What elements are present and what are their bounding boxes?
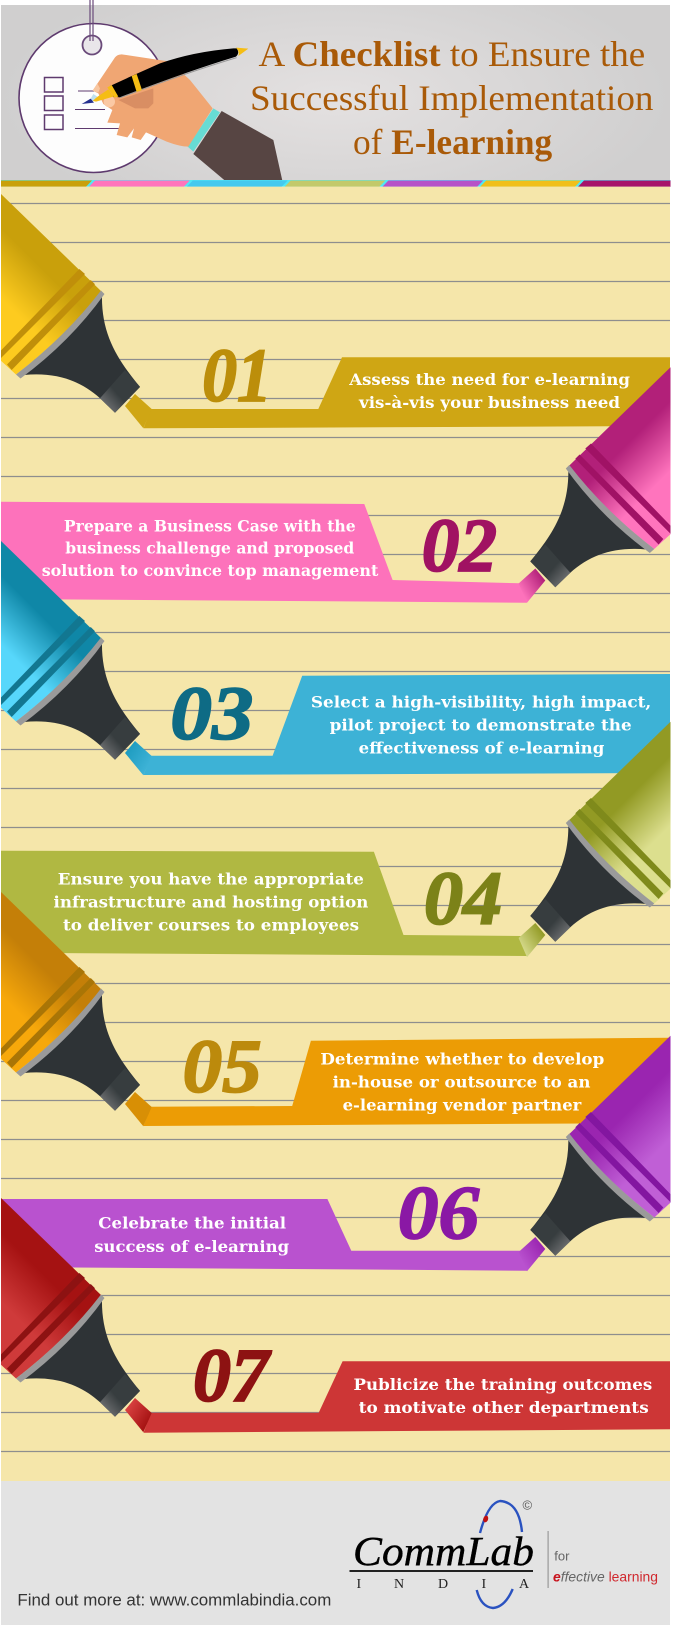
number 05: 05 xyxy=(183,1025,262,1109)
highlighter marker 1 xyxy=(0,191,152,428)
title: of E-learning xyxy=(353,122,552,162)
step 2 text: business challenge and proposed xyxy=(65,539,354,558)
step 5 text xyxy=(320,1050,604,1115)
CommLab India logo xyxy=(350,1498,658,1608)
step 2 text xyxy=(42,517,379,580)
step 7 text: to motivate other departments xyxy=(359,1398,649,1417)
CommLab India logo: D xyxy=(438,1577,448,1592)
icon: checklist tag, hand and pen xyxy=(19,0,282,181)
ribbon 7 xyxy=(144,1361,670,1433)
CommLab India logo: I xyxy=(482,1577,486,1592)
step 6 text: success of e-learning xyxy=(94,1237,289,1256)
ribbon 6 xyxy=(0,1199,527,1271)
ribbon 1 xyxy=(144,357,670,428)
step 1 text xyxy=(348,370,630,412)
number 04: 04 xyxy=(424,857,502,941)
CommLab India logo: N xyxy=(394,1577,404,1592)
CommLab India logo: © xyxy=(522,1498,532,1512)
CommLab India logo: for xyxy=(554,1549,570,1564)
step 5 text: e-learning vendor partner xyxy=(343,1096,582,1115)
CommLab India logo: effective learning xyxy=(553,1569,658,1585)
footer link text: Find out more at: www.commlabindia.com xyxy=(17,1591,331,1610)
highlighter marker 4 xyxy=(519,720,672,957)
step 7 text: Publicize the training outcomes xyxy=(354,1375,652,1394)
number 07: 07 xyxy=(193,1334,272,1418)
step 2 text: Prepare a Business Case with the xyxy=(64,517,356,536)
step 3 text: Select a high-visibility, high impact, xyxy=(311,692,651,711)
ribbon 5 xyxy=(144,1038,670,1126)
highlighter marker 5 xyxy=(0,889,152,1126)
colour strip xyxy=(0,180,671,187)
number 06: 06 xyxy=(398,1172,479,1256)
title: Successful Implementation xyxy=(250,78,654,118)
step 5 text: Determine whether to develop xyxy=(320,1050,604,1069)
step 3 text: effectiveness of e-learning xyxy=(359,739,604,758)
CommLab India logo: A xyxy=(519,1577,530,1592)
highlighter marker 6 xyxy=(519,1034,672,1271)
step 7 text xyxy=(354,1375,652,1417)
number 03: 03 xyxy=(170,672,253,756)
step 3 text: pilot project to demonstrate the xyxy=(330,716,632,735)
title xyxy=(250,34,654,162)
step 4 text: infrastructure and hosting option xyxy=(54,893,369,912)
CommLab India logo: CommLab xyxy=(353,1528,534,1574)
icon: hand holding pen xyxy=(82,48,282,181)
ribbon 4 xyxy=(0,851,527,956)
footer panel xyxy=(0,1481,670,1625)
highlighter marker 2 xyxy=(519,366,672,603)
step 6 text: Celebrate the initial xyxy=(98,1214,286,1233)
step 2 text: solution to convince top management xyxy=(42,561,379,580)
title: A Checklist to Ensure the xyxy=(258,34,645,74)
icon: hanging checklist tag xyxy=(19,0,168,172)
ribbon 3 xyxy=(144,674,670,775)
step 4 text xyxy=(54,870,369,935)
step 4 text: Ensure you have the appropriate xyxy=(58,870,364,889)
step 1 text: Assess the need for e-learning xyxy=(348,370,630,389)
ruled lines xyxy=(0,204,670,1452)
paper background xyxy=(0,187,670,1481)
header panel xyxy=(0,5,670,181)
ribbon 2 xyxy=(0,502,527,603)
step 3 text xyxy=(311,692,651,758)
step 1 text: vis-à-vis your business need xyxy=(358,393,620,412)
highlighter marker 3 xyxy=(0,538,152,775)
highlighter marker 7 xyxy=(0,1195,152,1432)
number 02: 02 xyxy=(422,504,497,588)
step 6 text xyxy=(94,1214,289,1256)
number 01: 01 xyxy=(202,334,272,418)
step 5 text: in-house or outsource to an xyxy=(333,1073,591,1092)
step 4 text: to deliver courses to employees xyxy=(63,916,359,935)
CommLab India logo: I xyxy=(356,1577,362,1592)
